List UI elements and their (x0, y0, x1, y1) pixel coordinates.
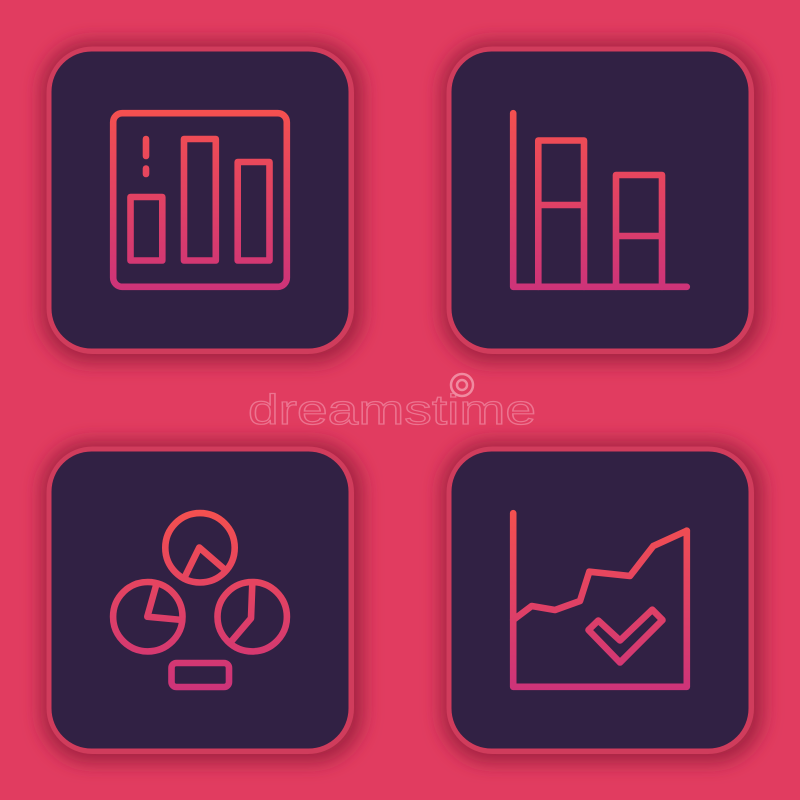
panel: area chart card (441, 441, 763, 763)
icon: area chart with check mark (513, 513, 687, 687)
watermark (248, 374, 536, 433)
panel: stacked bars card (441, 41, 763, 363)
panel: pie charts card (41, 441, 363, 763)
icon: framed bar chart with exclamation mark (113, 113, 287, 287)
icon: stacked bar chart with axes (513, 113, 687, 287)
watermark wordmark: dreamstime (248, 386, 536, 433)
icon: three pie charts and a rectangle (113, 513, 287, 687)
watermark logo (451, 374, 473, 396)
panel: bar chart card (41, 41, 363, 363)
